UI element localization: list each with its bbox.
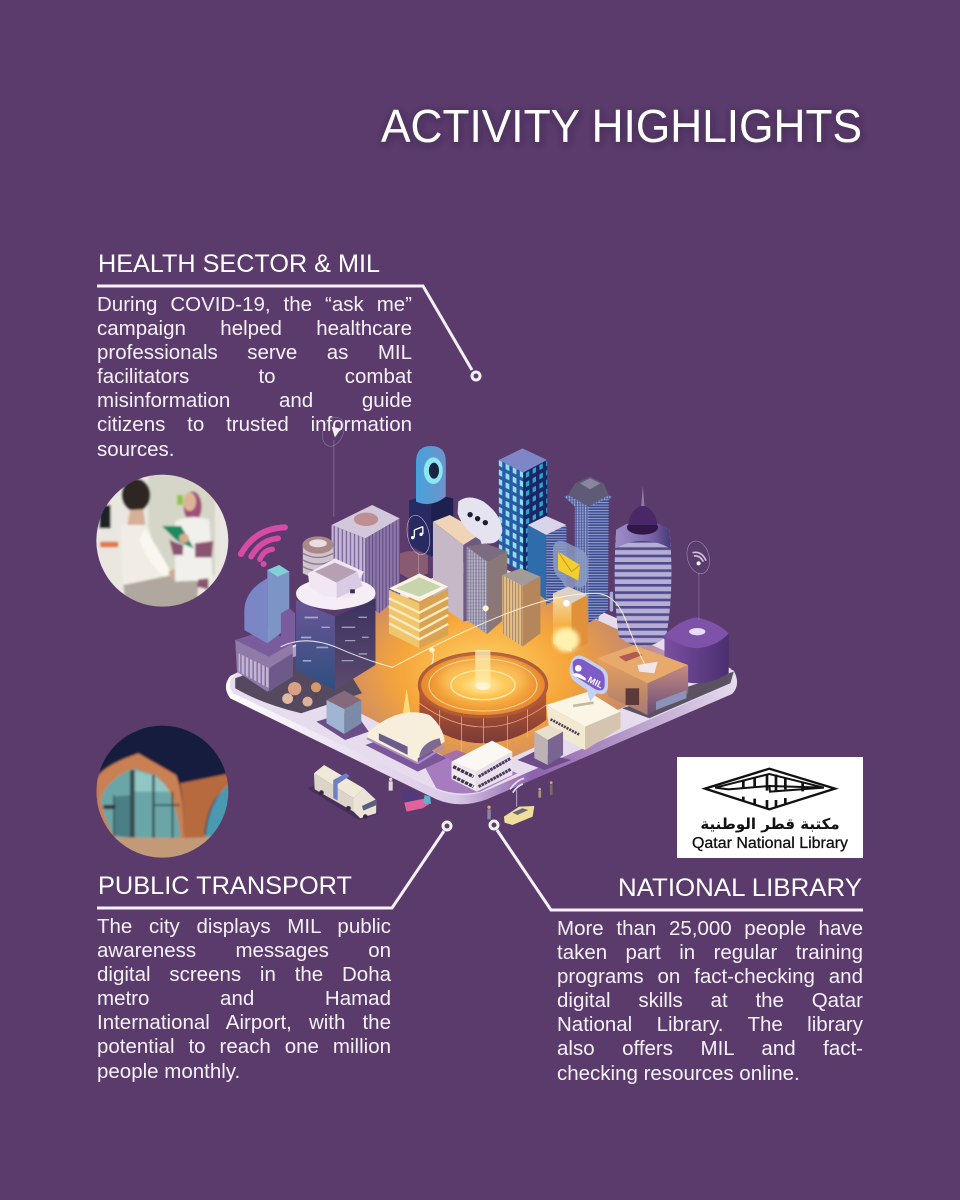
text block: public transport: International Airport, with the [97,1011,391,1034]
logo: Qatar National Library [677,757,863,858]
car with wifi [504,778,534,825]
text block: public transport: awareness messages on [97,939,391,962]
trees [282,682,321,710]
icon: music note [404,513,433,573]
people and small pink vehicle [389,778,553,819]
truck [307,765,379,820]
text block: national library: More than 25,000 people have [557,917,863,940]
tower: blue glass skyscraper [499,448,547,573]
text block: national library: checking resources online. [557,1062,800,1085]
tower: purple stripe block [332,505,400,613]
text block: national library: digital skills at the Qatar [557,989,863,1012]
icon: pink wifi [241,527,285,567]
text block: health sector: citizens to trusted information [97,413,412,436]
text block: health sector: During COVID-19, the “ask me” [97,293,412,316]
building: gray-purple cube front [534,725,563,765]
connector: public transport [97,822,451,908]
building: white dome terminal [367,712,445,763]
text block: national library: programs on fact-checking and [557,965,863,988]
building: glowing tower [553,587,588,652]
heading: health sector and MIL: HEALTH SECTOR & MIL [98,250,380,278]
text block: national library: also offers MIL and fact- [557,1037,863,1060]
icon: orange beam [403,688,411,717]
heading: public transport: PUBLIC TRANSPORT [98,872,352,900]
tower: crowned fine-grid skyscraper [564,477,612,623]
glowing network lines [281,593,646,675]
illustration: isometric smart city [226,414,737,825]
logo text: English name: Qatar National Library [692,835,848,852]
photo: airport / metro architecture [96,726,228,858]
icon: tall antenna pin [318,414,348,517]
text block: health sector: professionals serve as MIL [97,341,412,364]
building: small cube left [326,691,361,734]
building: purple cylinder [664,617,729,683]
text block: public transport: The city displays MIL public [97,915,391,938]
icon: MIL speech bubble: MIL [586,675,605,691]
text block: public transport: metro and Hamad [97,987,391,1010]
tower: gray and tan back building [433,515,482,622]
connector: health sector [97,286,480,380]
text block: national library [557,917,863,1085]
text block: public transport [97,915,392,1083]
title: ACTIVITY HIGHLIGHTS [381,100,862,152]
building: white bus-like block [452,741,512,792]
building: tan fluted tower [502,568,540,647]
building: white MIL block [546,692,621,750]
text block: public transport: people monthly. [97,1060,240,1083]
text block: health sector: misinformation and guide [97,389,412,412]
text block: health sector: sources. [97,438,174,461]
text block: health sector: campaign helped healthcare [97,317,412,340]
connector: national library [490,821,863,910]
building: low tan building [597,645,688,715]
building: orange central arena [419,650,547,753]
text block: public transport: digital screens in the Doha [97,963,391,986]
text block: national library: taken part in regular training [557,941,863,964]
text block: health sector: facilitators to combat [97,365,412,388]
text block: national library: National Library. The library [557,1013,863,1036]
tower: dark base with blue pill [409,446,453,557]
tower: striped cylinder with dome [615,486,671,647]
icon: white speech bubble [458,497,502,550]
building: gray fine-grid tower [467,543,507,634]
photo: healthcare consultation [93,473,233,610]
text block: health sector [97,293,412,461]
text block: public transport: potential to reach one million [97,1035,391,1058]
central glow [440,657,528,697]
icon: wifi antenna right [683,538,713,620]
building: dark city-window tower with white top [296,558,375,690]
icon: envelope bubble [553,541,588,593]
heading: national library: NATIONAL LIBRARY [618,874,862,902]
platform [226,557,737,804]
logo mark: diamond bridge [705,769,835,809]
building: left low block with fin [235,565,295,692]
icon: coin stack tower [302,536,334,580]
building: yellow striped block [389,573,448,648]
icon: MIL speech bubble [569,655,608,702]
icon: small coral roof block [400,551,428,580]
tower: mid blue tower [528,516,566,605]
logo text: Arabic name: مكتبة قطر الوطنية [700,815,840,833]
